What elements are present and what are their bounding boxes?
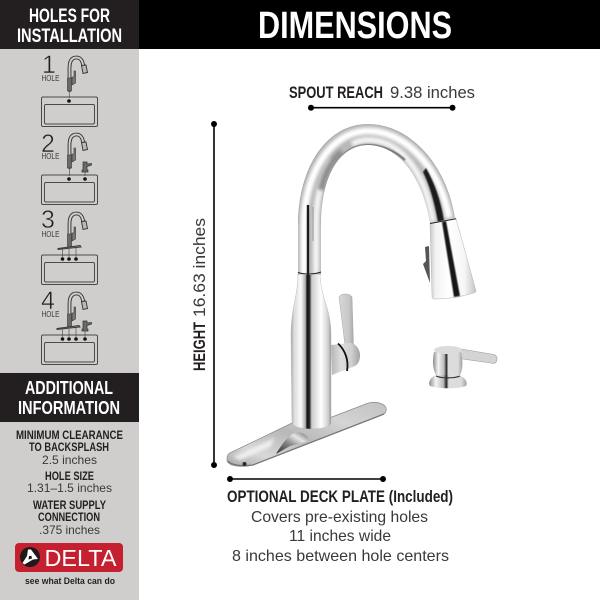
icon: 3 hole installation: HOLE [42, 229, 60, 239]
icon: 4 hole installation: HOLE [42, 309, 60, 319]
icon: 1 hole installation [42, 51, 98, 126]
text: water supply connection: WATER SUPPLY [33, 500, 106, 512]
arc shoulder shade [321, 152, 342, 190]
header: additional information: INFORMATION [18, 397, 120, 418]
icon: 4 hole installation [41, 287, 98, 364]
dimension: height [191, 121, 217, 468]
icon: 1 hole installation: HOLE [42, 73, 60, 83]
text: hole size: HOLE SIZE [45, 471, 94, 483]
text: water supply connection: CONNECTION [38, 512, 100, 524]
dimension: deck plate width [227, 476, 386, 482]
header: holes for installation: HOLES FOR [29, 5, 110, 27]
header: dimensions [139, 0, 600, 49]
collar line [298, 272, 321, 274]
header: additional information [0, 373, 139, 422]
plate screw [242, 462, 246, 466]
text: optional deck plate: Covers pre-existing holes [251, 509, 428, 526]
deck plate [227, 402, 386, 466]
icon: 2 hole installation [41, 130, 98, 204]
arc outer edge shade [297, 123, 456, 225]
logo: Delta [15, 543, 123, 587]
arc inner highlight [316, 140, 433, 275]
text: optional deck plate [227, 488, 453, 565]
head rim [430, 219, 456, 224]
illustration: soap dispenser [429, 346, 497, 388]
dimension: spout reach: SPOUT REACH [289, 84, 383, 102]
illustration: faucet [227, 123, 476, 466]
plate recess [276, 432, 309, 454]
dark reflection right [423, 168, 444, 222]
icon: 4 hole installation: 4 [41, 287, 55, 315]
dimension: spout reach [289, 84, 475, 111]
header: holes for installation [0, 0, 140, 49]
text: optional deck plate: OPTIONAL DECK PLATE (Included) [227, 488, 453, 506]
plate highlight [233, 438, 275, 460]
panel: left sidebar [0, 0, 140, 600]
header: holes for installation: INSTALLATION [17, 25, 122, 47]
dark reflection left [307, 205, 309, 275]
logo: Delta: DELTA [44, 545, 117, 571]
text: minimum clearance: MINIMUM CLEARANCE [16, 430, 123, 442]
upper arc [297, 123, 456, 275]
lower body [291, 272, 331, 429]
text: minimum clearance: 2.5 inches [42, 453, 97, 467]
handle cylinder [331, 343, 360, 375]
text: hole size: 1.31–1.5 inches [27, 481, 112, 495]
logo: Delta: see what Delta can do [25, 576, 115, 587]
dimension: height: HEIGHT [191, 322, 209, 371]
spray head [430, 218, 476, 299]
icon: 3 hole installation: 3 [41, 206, 55, 234]
icon: 3 hole installation [41, 206, 98, 284]
text: water supply connection [33, 500, 106, 537]
text: optional deck plate: 11 inches wide [289, 528, 391, 545]
dimension: height: 16.63 inches [191, 218, 209, 317]
arc outer highlight [304, 131, 449, 275]
plate front edge [228, 414, 384, 466]
header: dimensions: DIMENSIONS [258, 5, 452, 47]
handle band [338, 344, 348, 371]
head dark stripe [442, 221, 460, 297]
text: water supply connection: .375 inches [39, 523, 100, 537]
arc inner edge shade [322, 145, 405, 225]
header: additional information: ADDITIONAL [25, 377, 113, 398]
handle lever [339, 294, 354, 345]
text: minimum clearance [16, 430, 123, 467]
icon: 2 hole installation: HOLE [42, 151, 60, 161]
text: minimum clearance: TO BACKSPLASH [29, 442, 109, 454]
dimension: spout reach: 9.38 inches [390, 84, 475, 102]
icon: 2 hole installation: 2 [41, 130, 55, 158]
icon: 1 hole installation: 1 [42, 51, 56, 79]
spray button [423, 246, 430, 283]
text: hole size [27, 471, 112, 495]
text: optional deck plate: 8 inches between hole centers [232, 548, 449, 565]
window on left column [312, 207, 314, 241]
